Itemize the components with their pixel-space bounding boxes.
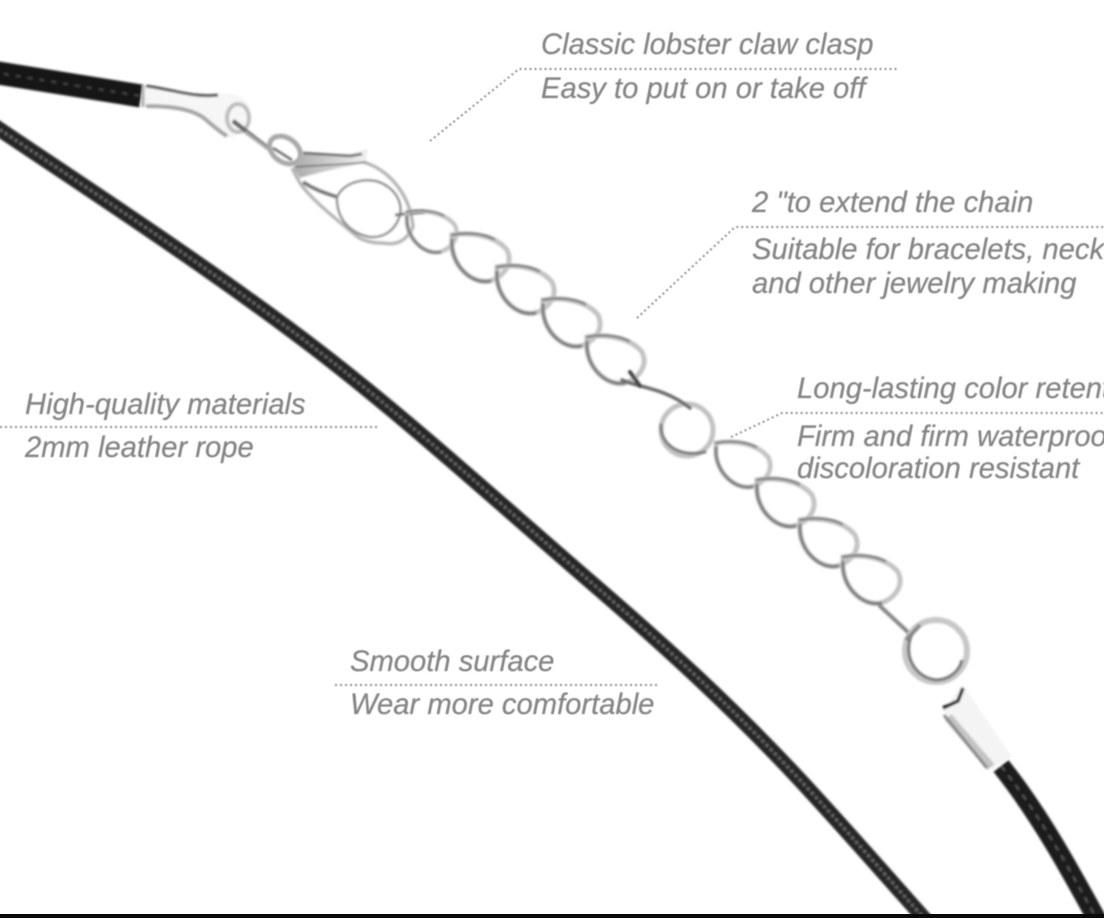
bottom black edge [0,914,1104,918]
callout: color retention: discoloration resistant [797,453,1081,485]
silver cord end cap: right [942,685,1012,769]
callout: materials: 2mm leather rope [24,432,254,464]
small connector links [233,121,306,170]
callout: lobster claw clasp: Easy to put on or take off [541,73,868,105]
callout: chain extender: 2 "to extend the chain [751,187,1033,219]
extender chain links [407,211,910,634]
leather cord: right end [1001,766,1100,918]
callout: chain extender: and other jewelry making [752,268,1076,300]
callout: materials [0,389,377,464]
callout: lobster claw clasp: Classic lobster claw clasp [541,29,874,61]
callout: smooth surface [335,646,657,721]
callout: materials: High-quality materials [25,389,306,421]
callout: lobster claw clasp [430,29,897,141]
jump ring [905,620,967,682]
callout: smooth surface: Smooth surface [350,646,554,678]
lobster claw clasp [293,148,425,244]
leather cord: top left end [0,72,141,96]
callout: chain extender [637,187,1104,318]
callout: smooth surface: Wear more comfortable [350,689,654,721]
silver cord end cap: left [143,85,250,138]
callout: color retention [731,373,1104,485]
leather cord: main long strand [0,123,930,918]
